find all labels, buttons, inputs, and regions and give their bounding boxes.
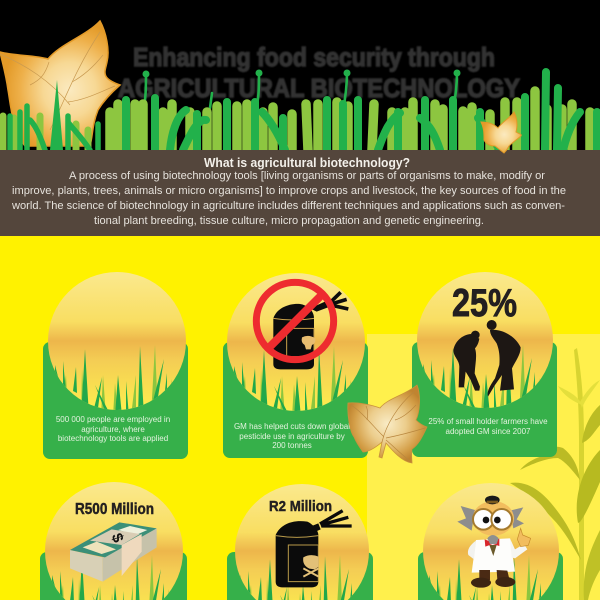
main title bbox=[118, 42, 520, 103]
card: scientist bbox=[418, 483, 563, 600]
caption: GM has helped cuts down global bbox=[234, 422, 350, 431]
caption: biotechnology tools are applied bbox=[58, 434, 168, 443]
icon: farmers silhouettes bbox=[453, 320, 521, 397]
corn plant bbox=[510, 348, 600, 600]
caption: 25% of small holder farmers have bbox=[428, 417, 548, 426]
card: smallholder farmers bbox=[412, 272, 557, 457]
icon: prohibited spray can bbox=[256, 282, 348, 369]
icon: spray can bbox=[276, 511, 352, 587]
stat: R500 Million: R500 Million bbox=[75, 501, 154, 518]
stat: R2 Million: R2 Million bbox=[269, 498, 332, 515]
caption bbox=[428, 417, 548, 436]
card: R500 million bbox=[40, 482, 187, 600]
caption bbox=[234, 422, 350, 450]
caption: 200 tonnes bbox=[272, 441, 312, 450]
caption: 500 000 people are employed in bbox=[56, 415, 170, 424]
intro paragraph bbox=[11, 170, 566, 227]
stat: 25%: 25% bbox=[452, 282, 517, 325]
main title: Enhancing food security through bbox=[133, 42, 495, 72]
intro heading: What is agricultural biotechnology? bbox=[204, 155, 410, 170]
caption bbox=[56, 415, 170, 443]
intro paragraph: world. The science of biotechnology in agriculture includes different techniques and applications such as conven- bbox=[11, 200, 565, 212]
icon: large golden leaf bbox=[0, 21, 120, 146]
icon: tan leaf overlay bbox=[348, 385, 427, 463]
intro paragraph: A process of using biotechnology tools [living organisms or parts of organisms to make, modify or bbox=[69, 170, 545, 182]
caption: agriculture, where bbox=[81, 425, 145, 434]
grass strip bbox=[3, 70, 597, 150]
intro paragraph: tional plant breeding, tissue culture, micro propagation and genetic engineering. bbox=[94, 215, 484, 227]
icon: cash stack: $ bbox=[108, 531, 127, 545]
card: R2 million bbox=[227, 484, 373, 600]
card: employment bbox=[43, 272, 188, 459]
icon: cartoon scientist bbox=[457, 496, 531, 588]
pale yellow panel bbox=[367, 334, 600, 600]
caption: pesticide use in agriculture by bbox=[239, 432, 345, 441]
brown intro panel bbox=[0, 150, 600, 236]
card: pesticide reduction bbox=[223, 273, 368, 458]
icon: cash stack bbox=[70, 522, 157, 582]
intro paragraph: improve, plants, trees, animals or micro organisms] to improve crops and livestock, the key sources of food in the bbox=[12, 185, 566, 197]
yellow background bbox=[0, 236, 600, 600]
main title: AGRICULTURAL BIOTECHNOLOGY bbox=[118, 73, 520, 103]
caption: adopted GM since 2007 bbox=[446, 427, 531, 436]
black header band bbox=[0, 0, 600, 150]
icon: small golden leaf bbox=[481, 112, 521, 153]
